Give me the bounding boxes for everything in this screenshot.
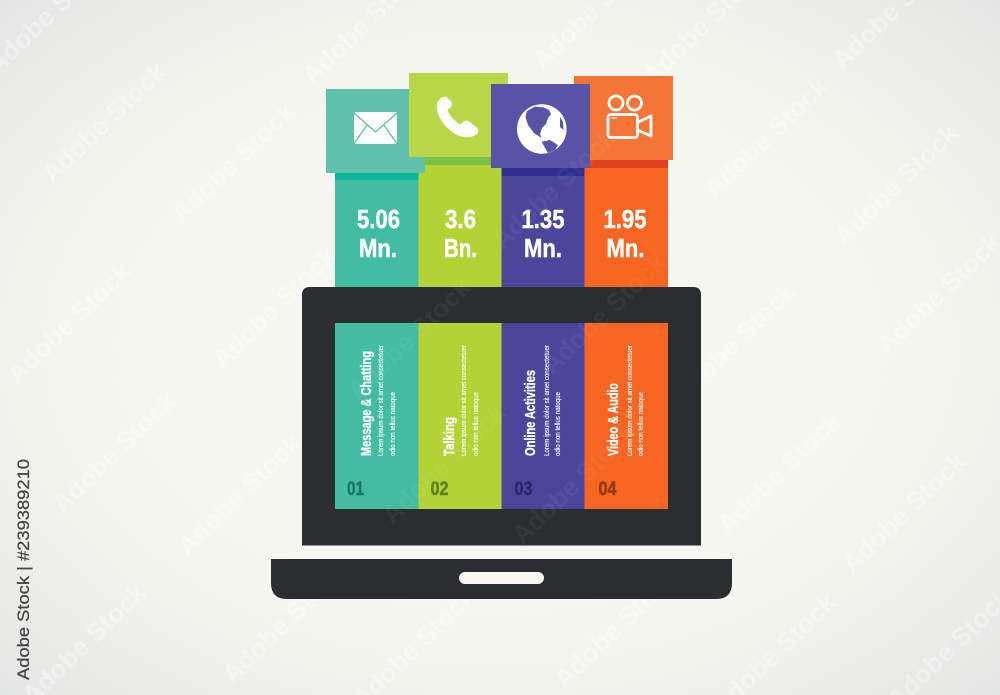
panel: online activities [502,323,585,509]
panel: talking: odio non tellus natoque [471,392,480,456]
column: teal stat: 5.06 [357,204,400,234]
panel: talking: 02 [430,479,448,500]
panel: video and audio: Video & Audio [606,383,622,456]
column: lime stat: 3.6 [445,204,476,234]
panel: message and chatting: Message & Chatting [359,351,375,456]
panel: message and chatting: 01 [347,479,364,500]
panel: message and chatting [335,323,419,509]
column: lime stat [418,157,502,287]
watermarks over graphic: Adobe Stock [486,122,622,255]
watermarks over graphic [341,122,672,550]
watermarks: Adobe Stock [206,241,342,374]
watermarks over graphic: Adobe Stock [536,247,672,380]
panel: video and audio: 04 [598,479,617,500]
watermarks: Adobe Stock [836,446,972,579]
panel: video and audio: odio non tellus natoque [636,392,645,456]
watermarks: Adobe Stock [698,71,834,204]
watermarks: Adobe Stock [1,256,137,389]
watermarks: Adobe Stock [171,428,307,561]
panel: message and chatting: Lorem ipsum dolor sit amet consectetuer [376,345,385,456]
watermarks: Adobe Stock [36,56,172,189]
panel: video and audio [584,323,668,509]
watermarks over graphic: Adobe Stock [341,272,477,405]
watermarks: Adobe Stock [165,96,301,229]
column: orange stat: Mn. [606,233,644,263]
column: purple stat: 1.35 [522,204,564,234]
column: teal stat [335,173,419,287]
watermarks: Adobe Stock [828,118,964,251]
watermarks over graphic: Adobe Stock [376,397,512,530]
watermarks: Adobe Stock [711,406,847,539]
panel: online activities: 03 [514,479,532,500]
laptop screen [302,287,701,546]
watermarks: Adobe Stock [548,561,684,694]
stock id label: Adobe Stock | #239389210 [14,459,33,680]
column: teal stat: Mn. [359,233,397,263]
icon tile: phone [409,73,508,157]
column: purple stat [502,168,585,287]
laptop base [271,559,732,599]
icon tile: video camera [574,76,673,160]
panel: message and chatting: odio non tellus natoque [388,392,397,456]
panel: video and audio: Lorem ipsum dolor sit amet consectetuer [625,345,634,456]
column: orange stat [584,160,668,287]
panel: online activities: Online Activities [523,370,539,456]
watermarks: Adobe Stock [46,386,182,519]
watermarks: Adobe Stock [666,276,802,409]
panel: online activities: Lorem ipsum dolor sit amet consectetuer [542,345,551,456]
watermarks: Adobe Stock [216,556,352,689]
column: purple stat: Mn. [524,233,562,263]
icon tile: globe [491,84,590,168]
panel: talking: Talking [442,417,458,456]
panel: online activities: odio non tellus natoque [553,392,562,456]
panel: talking: Lorem ipsum dolor sit amet consectetuer [459,345,468,456]
column: lime stat: Bn. [444,233,477,263]
panel: talking [418,323,502,509]
watermarks over graphic: Adobe Stock [506,417,642,550]
icon tile: envelope [326,89,425,173]
column: orange stat: 1.95 [604,204,646,234]
